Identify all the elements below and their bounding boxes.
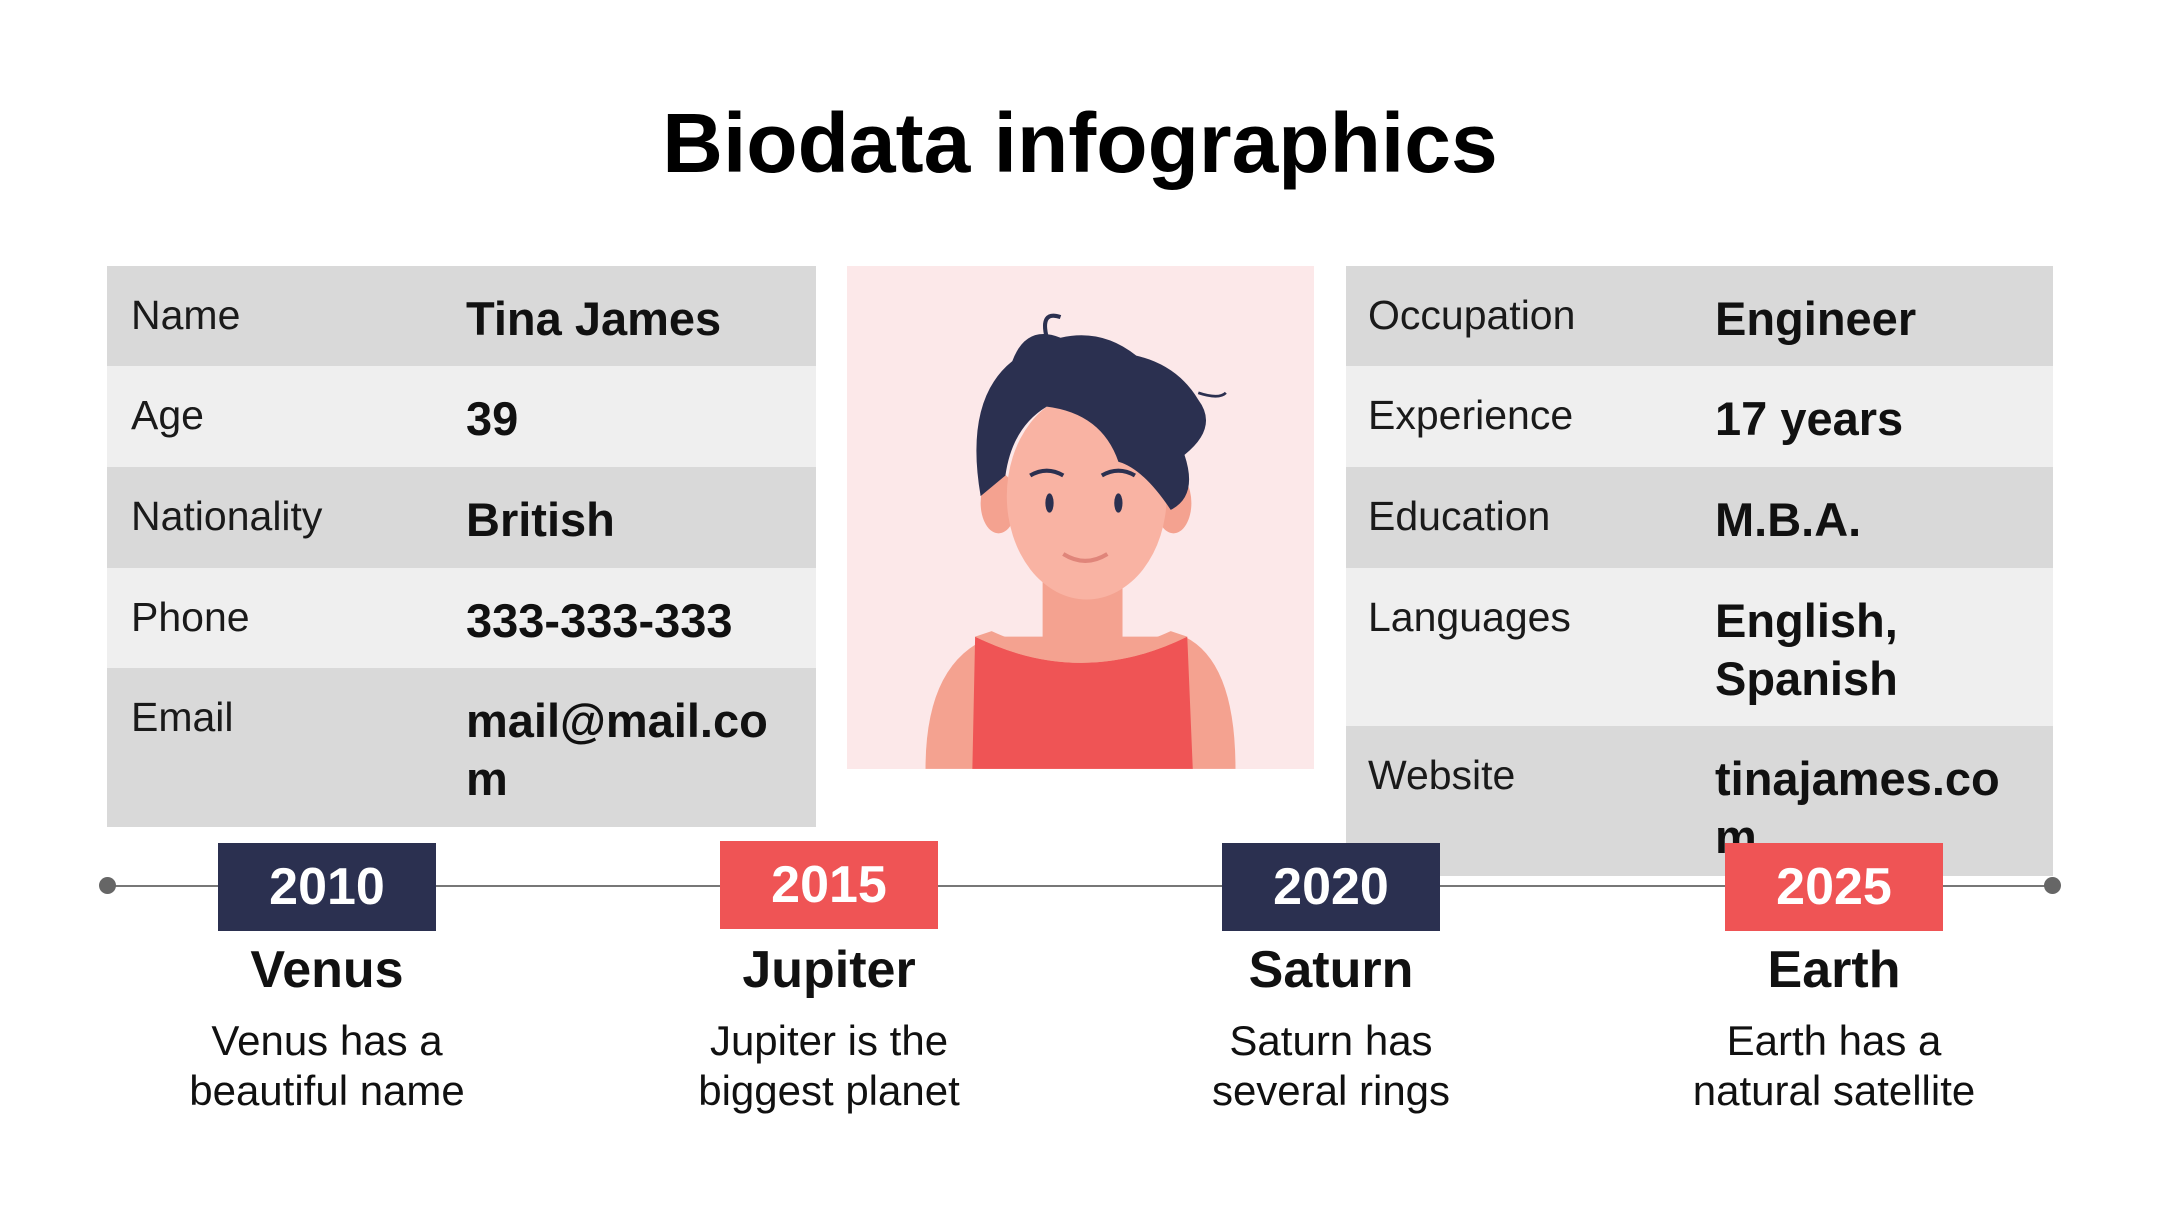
panel: left table: Name — [131, 292, 240, 338]
milestone: 2020: Saturn has — [1229, 1017, 1433, 1064]
panel: right table: M.B.A. — [1715, 493, 1861, 546]
panel: right table: English, — [1715, 594, 1898, 647]
panel: right table: Education — [1368, 493, 1550, 539]
milestone: 2010: Venus — [250, 941, 404, 999]
panel: right table: Experience — [1368, 392, 1573, 438]
milestone: 2025 — [1693, 843, 1975, 1114]
milestone: 2025: 2025 — [1776, 858, 1892, 916]
panel: left table — [107, 266, 816, 827]
panel: right table: Languages — [1368, 594, 1571, 640]
milestone: 2015 — [698, 841, 960, 1114]
milestone: 2015: 2015 — [771, 856, 887, 914]
panel: right table: tinajames.co — [1715, 752, 2000, 805]
milestone: 2025: Earth has a — [1727, 1017, 1941, 1064]
milestone: 2020: Saturn — [1249, 941, 1413, 999]
milestone: 2015: biggest planet — [698, 1067, 960, 1114]
panel: right table: Spanish — [1715, 652, 1898, 705]
milestone: 2010: 2010 — [269, 858, 385, 916]
milestone: 2020 — [1212, 843, 1450, 1114]
panel: left table: 333-333-333 — [466, 594, 733, 647]
panel: left table: Email — [131, 694, 234, 740]
panel: right table: Engineer — [1715, 292, 1916, 345]
panel: right table — [1346, 266, 2053, 876]
milestone: 2025: Earth — [1768, 941, 1900, 999]
milestone: 2010 — [189, 843, 465, 1114]
panel: right table: 17 years — [1715, 392, 1903, 445]
milestone: 2015: Jupiter is the — [710, 1017, 948, 1064]
timeline line — [107, 885, 2053, 887]
panel: left table: Age — [131, 392, 204, 438]
panel: left table: Tina James — [466, 292, 721, 345]
milestone: 2010: beautiful name — [189, 1067, 465, 1114]
panel: right table: Website — [1368, 752, 1515, 798]
milestone: 2020: 2020 — [1273, 858, 1389, 916]
panel: left table: mail@mail.co — [466, 694, 768, 747]
panel: right table: Occupation — [1368, 292, 1575, 338]
panel: left table: Phone — [131, 594, 250, 640]
panel: left table: British — [466, 493, 615, 546]
milestone: 2020: several rings — [1212, 1067, 1450, 1114]
panel: photo — [847, 266, 1314, 769]
panel: left table: 39 — [466, 392, 518, 445]
panel: left table: m — [466, 752, 508, 805]
title: Biodata infographics — [662, 96, 1498, 190]
panel: right table: m — [1715, 810, 1757, 863]
panel: left table: Nationality — [131, 493, 322, 539]
icon: avatar — [926, 314, 1236, 769]
milestone: 2025: natural satellite — [1693, 1067, 1975, 1114]
milestone: 2015: Jupiter — [742, 941, 916, 999]
milestone: 2010: Venus has a — [211, 1017, 443, 1064]
